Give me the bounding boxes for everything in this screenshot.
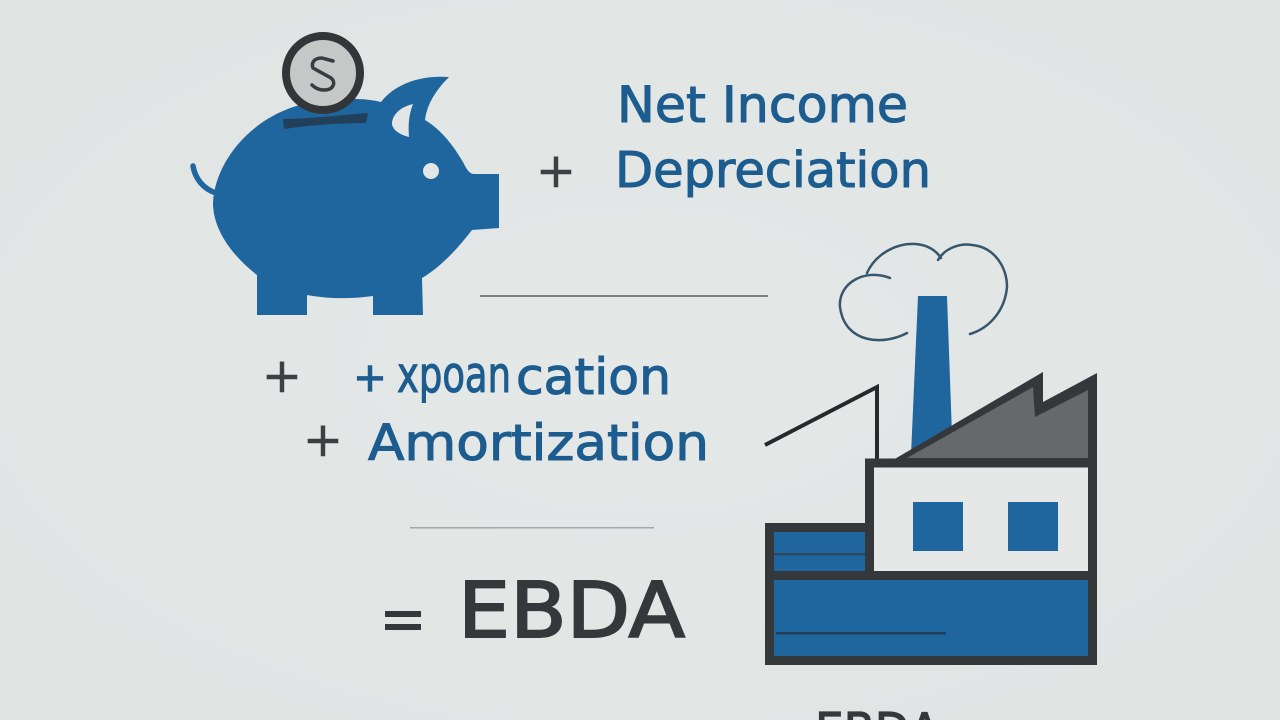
upper building <box>870 463 1092 576</box>
pig ear opening <box>392 104 413 137</box>
pig body <box>213 77 499 315</box>
label: net income: Net Income <box>617 76 908 134</box>
pig tail <box>193 166 216 193</box>
factory window left <box>913 502 963 551</box>
icon: factory <box>765 244 1097 661</box>
factory smoke cloud <box>840 244 1007 340</box>
plus sign: amortization row: + <box>303 412 343 468</box>
saw-tooth roof grey fill <box>907 387 1088 458</box>
coin slot <box>283 113 368 129</box>
factory window right <box>1008 502 1058 551</box>
factory chimney <box>911 296 952 455</box>
factory base <box>770 576 1092 660</box>
annex stripe <box>774 553 865 556</box>
label: depreciation: Depreciation <box>615 142 931 199</box>
divider line lower <box>410 527 654 528</box>
equals sign <box>385 611 421 630</box>
divider line upper <box>480 295 768 297</box>
lower left annex <box>770 528 865 576</box>
outlined left roof <box>765 387 877 460</box>
icon: piggy bank with coin <box>193 36 499 315</box>
result: EBDA: EBDA <box>458 567 685 656</box>
dollar glyph on coin <box>312 58 334 90</box>
plus sign: left: + <box>262 348 302 404</box>
garbled depreciation label <box>353 346 671 406</box>
plus sign: net income row: + <box>536 143 576 199</box>
label: amortization: Amortization <box>368 414 709 472</box>
coin <box>286 36 360 110</box>
garbled depreciation label: xpoan <box>397 346 511 404</box>
base stripe <box>776 632 946 634</box>
garbled depreciation label: + <box>353 355 387 401</box>
pig eye <box>423 163 439 179</box>
saw-tooth roof outline <box>893 372 1097 460</box>
garbled depreciation label: cation <box>516 348 671 406</box>
